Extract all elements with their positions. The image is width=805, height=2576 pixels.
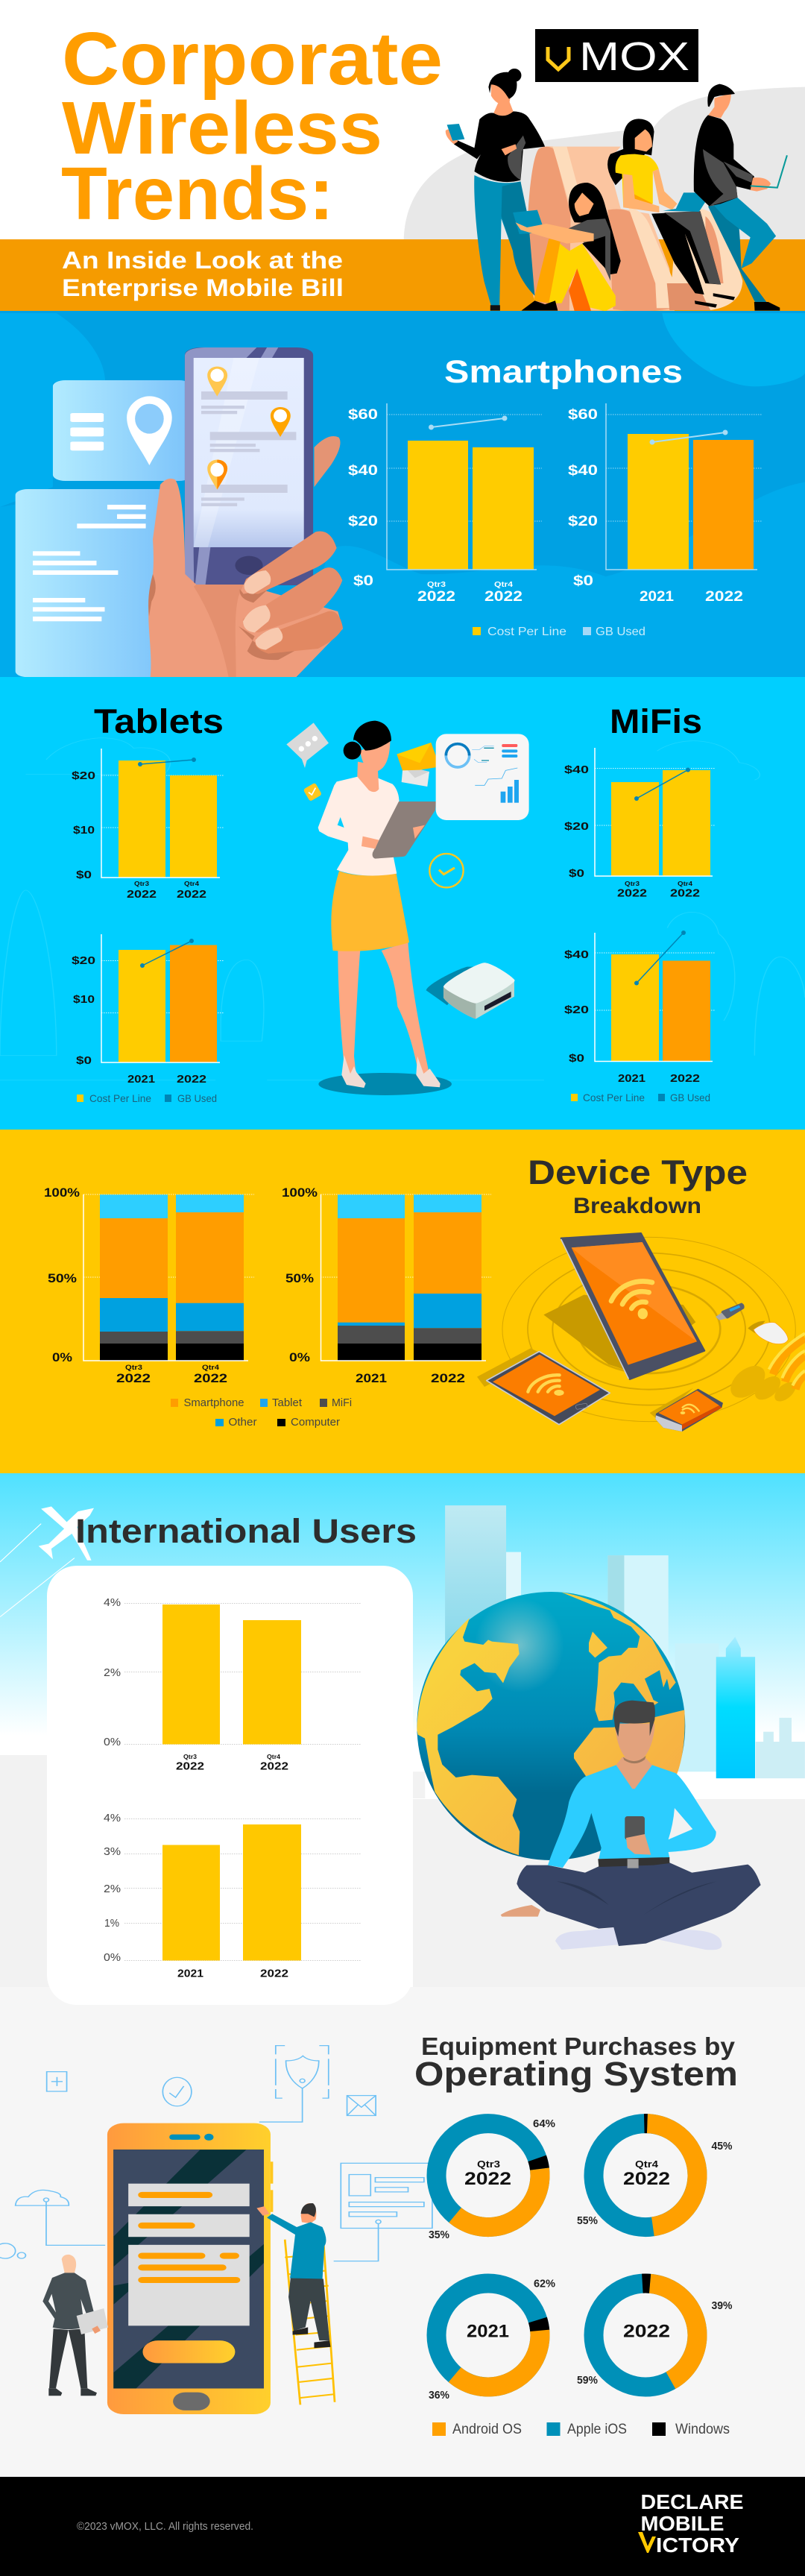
- bar chart: smartphones by quarter: $40: [348, 463, 378, 479]
- hair: [613, 1701, 655, 1736]
- legend: mifis: GB Used: [670, 1092, 710, 1103]
- face: [360, 740, 390, 772]
- subtitle: An Inside Look at the: [62, 247, 343, 274]
- icon: mifi router: [426, 963, 515, 1019]
- card: international charts: [47, 1566, 413, 2005]
- stacked bars: quarters: [44, 1185, 254, 1385]
- bar chart: tablets by quarter: 2022: [177, 888, 206, 901]
- bar chart: smartphones by year: [568, 403, 763, 605]
- bar chart: mifis by year: $20: [564, 1004, 589, 1016]
- donut chart: Q4 2022: 45%: [711, 2140, 732, 2153]
- stacked bars: quarters: Qtr4: [202, 1364, 219, 1371]
- donut chart: Q4 2022: 55%: [577, 2214, 598, 2227]
- stacked bars: years: 0%: [289, 1350, 310, 1364]
- bar chart: international by year: 2021: [177, 1968, 203, 1980]
- donut chart: Q3 2022: 35%: [429, 2229, 449, 2241]
- panel: smartphones: [0, 311, 805, 678]
- legend: device types: Other: [228, 1416, 257, 1429]
- illustration: globe: [417, 1592, 685, 1860]
- bar chart: international by quarter: Qtr4: [267, 1754, 281, 1760]
- bar chart: smartphones by quarter: $20: [348, 514, 378, 529]
- stacked bars: quarters: 100%: [44, 1185, 80, 1200]
- bar chart: mifis by quarter: 2022: [617, 887, 647, 899]
- bar chart: smartphones by year: 2022: [705, 589, 743, 605]
- person: man on ladder: [256, 2203, 331, 2348]
- shoes: [341, 1055, 441, 1088]
- heading: Device Type Breakdown: Breakdown: [573, 1194, 701, 1218]
- bar chart: smartphones by quarter: $0: [353, 573, 373, 589]
- subtitle: Enterprise Mobile Bill: [62, 274, 344, 301]
- bar chart: tablets by quarter: $0: [76, 869, 92, 881]
- heading: equipment purchases: [414, 2032, 738, 2093]
- donut chart: Q3 2022: 2022: [464, 2169, 511, 2189]
- donut chart: Q3 2022: Qtr3: [477, 2158, 500, 2170]
- donut chart: 2021: 62%: [534, 2278, 555, 2290]
- bar chart: smartphones by quarter: Qtr4: [494, 581, 514, 589]
- bar chart: mifis by quarter: [564, 748, 716, 899]
- tablet: [373, 802, 436, 859]
- person: man standing with documents: [42, 2255, 108, 2396]
- bar chart: tablets by year: 2021: [127, 1073, 155, 1086]
- donut chart: Q3 2022: [429, 2117, 555, 2241]
- bar chart: international by quarter: 4%: [104, 1596, 121, 1609]
- stacked bars: years: 100%: [282, 1185, 318, 1200]
- bar chart: tablets by quarter: Qtr4: [184, 881, 200, 887]
- illustration: phone with map pins and cards: [16, 347, 341, 677]
- icon: chat bubble: [286, 722, 329, 768]
- bar chart: tablets by quarter: $10: [73, 824, 95, 837]
- panel: device type breakdown: [0, 1130, 805, 1473]
- person: woman on chair with laptop: [607, 119, 735, 308]
- bar chart: mifis by year: 2021: [618, 1072, 645, 1085]
- phone: [185, 347, 313, 585]
- person: standing woman with phone: [446, 69, 545, 311]
- illustration: big phone with two businessmen: [0, 2046, 432, 2414]
- bar chart: mifis by quarter: Qtr3: [625, 881, 640, 887]
- donut chart: 2022: 39%: [711, 2299, 732, 2312]
- heading: Device Type Breakdown: [528, 1153, 748, 1218]
- legend: device types: Computer: [291, 1416, 340, 1429]
- bar chart: mifis by year: $0: [569, 1052, 584, 1065]
- subtitle band: [0, 239, 805, 311]
- legend: smartphones: Cost Per Line: [487, 626, 566, 638]
- legend: operating systems: Windows: [675, 2422, 730, 2437]
- title: Wireless: [62, 86, 382, 170]
- heading: Tablets: Tablets: [94, 702, 224, 740]
- large wifi signal: [724, 1333, 805, 1405]
- legend: device types: [171, 1396, 352, 1429]
- bar chart: international by quarter: [104, 1596, 362, 1773]
- legs: [338, 942, 430, 1079]
- donut chart: Q3 2022: 64%: [533, 2117, 555, 2130]
- bar chart: international by year: 0%: [104, 1951, 121, 1964]
- legend: smartphones: GB Used: [596, 626, 645, 638]
- torso: [548, 1765, 716, 1868]
- header background blob: [404, 87, 805, 239]
- tablet shadow: [543, 1295, 695, 1372]
- belt: [598, 1857, 669, 1867]
- donut chart: 2022: 59%: [577, 2374, 598, 2387]
- bar chart: international by quarter: 2022: [260, 1760, 288, 1773]
- bar chart: tablets by quarter: Qtr3: [134, 881, 150, 887]
- heading: equipment purchases: Equipment Purchases by: [421, 2032, 736, 2060]
- bar chart: mifis by year: 2022: [670, 1072, 700, 1085]
- bar chart: mifis by quarter: $20: [564, 820, 589, 833]
- bar chart: mifis by quarter: Qtr4: [678, 881, 693, 887]
- bar chart: international by year: 1%: [104, 1917, 119, 1930]
- illustration: man sitting with phone: [501, 1701, 761, 1950]
- blouse: [318, 777, 400, 875]
- chair: [527, 146, 742, 311]
- signal rings: [502, 1237, 795, 1422]
- floating card: text: [16, 489, 169, 677]
- icon: check badge: [303, 783, 322, 802]
- hands: [362, 825, 425, 848]
- legend: device types: Tablet: [272, 1396, 303, 1409]
- heading: Device Type Breakdown: Device Type: [528, 1153, 748, 1191]
- bar chart: smartphones by year: $20: [568, 514, 598, 529]
- bar chart: international by year: 4%: [104, 1812, 121, 1824]
- copyright: ©2023 vMOX, LLC. All rights reserved.: [77, 2520, 253, 2533]
- icon: envelopes: [397, 743, 440, 787]
- feet: [501, 1905, 540, 1917]
- bar chart: international by year: [104, 1812, 362, 1980]
- line icons and connectors: [0, 2046, 432, 2261]
- hair: [344, 721, 391, 760]
- stacked bars: quarters: 2022: [116, 1371, 151, 1385]
- illustration: airplane and trails: [0, 1506, 94, 1617]
- icon: check circle: [429, 854, 464, 887]
- bar chart: international by year: 3%: [104, 1845, 121, 1858]
- slogan: Declare Mobile Victory: MOBILE: [641, 2512, 724, 2535]
- title: Corporate: [62, 17, 443, 101]
- donut chart: 2021: [429, 2278, 555, 2402]
- bar chart: mifis by quarter: $0: [569, 867, 584, 880]
- bar chart: mifis by quarter: 2022: [670, 887, 700, 899]
- bar chart: tablets by year: 2022: [177, 1073, 206, 1086]
- floor strip behind card bottom: [0, 1987, 805, 2017]
- illustration: team with devices on a chair: [446, 69, 787, 311]
- legend: operating systems: [432, 2422, 730, 2437]
- panel: international users: [0, 1473, 805, 2017]
- donut chart: 2021: 2021: [467, 2322, 509, 2341]
- legend: operating systems: Apple iOS: [567, 2422, 627, 2437]
- heading: Smartphones: Smartphones: [444, 354, 683, 390]
- legend: device types: MiFi: [332, 1396, 352, 1409]
- device: large tablet: [561, 1233, 704, 1379]
- bar chart: tablets by quarter: [72, 749, 224, 901]
- title: [61, 17, 443, 236]
- bar chart: smartphones by year: 2021: [640, 589, 674, 605]
- stacked bars: years: 50%: [285, 1271, 314, 1285]
- stacked bars: quarters: 2022: [194, 1371, 227, 1385]
- panel: footer: [0, 2477, 805, 2576]
- bar chart: smartphones by quarter: [348, 403, 542, 605]
- stacked bars: quarters: 50%: [48, 1271, 77, 1285]
- donut chart: 2022: [577, 2283, 732, 2387]
- bar chart: international by year: 2022: [260, 1968, 288, 1980]
- bar chart: tablets by quarter: 2022: [127, 888, 157, 901]
- bar chart: smartphones by quarter: 2022: [484, 589, 523, 605]
- logo: vMOX: [535, 29, 698, 82]
- person: man with laptop: [694, 84, 787, 311]
- donut chart: Q4 2022: [577, 2123, 732, 2227]
- illustration: hand holding phone: [148, 479, 343, 677]
- neck: [357, 762, 379, 792]
- floating card: location: [53, 380, 192, 481]
- ladder: [285, 2240, 335, 2405]
- legend: mifis: Cost Per Line: [583, 1092, 645, 1103]
- skirt: [331, 871, 409, 951]
- panel: equipment purchases by operating system: [0, 2005, 805, 2477]
- bar chart: tablets by year: $20: [72, 954, 95, 967]
- stacked bars: quarters: Qtr3: [125, 1364, 142, 1371]
- slogan: Declare Mobile Victory: DECLARE: [641, 2490, 744, 2513]
- stacked bars: years: 2022: [431, 1371, 465, 1385]
- panel: header: [0, 0, 805, 313]
- heading: equipment purchases: Operating System: [414, 2055, 738, 2093]
- bar chart: international by quarter: Qtr3: [183, 1754, 198, 1760]
- heading: International Users: International Users: [75, 1512, 417, 1550]
- decorative circles and waves: [0, 313, 805, 678]
- legend: tablets: GB Used: [177, 1092, 217, 1104]
- bar chart: tablets by year: $10: [73, 993, 95, 1006]
- legend: operating systems: Android OS: [452, 2422, 522, 2437]
- big phone: [107, 2123, 273, 2414]
- stacked bars: years: [282, 1185, 491, 1385]
- legend: tablets: Cost Per Line: [89, 1092, 151, 1104]
- legs: [517, 1862, 761, 1946]
- donut chart: Q4 2022: Qtr4: [635, 2158, 659, 2170]
- donut chart: Q4 2022: 2022: [623, 2169, 670, 2189]
- bar chart: international by year: 2%: [104, 1883, 121, 1895]
- title: Trends:: [61, 152, 334, 236]
- legend: mifis: [571, 1092, 710, 1103]
- bar chart: mifis by year: $40: [564, 948, 589, 961]
- donut chart: 2022: 2022: [623, 2322, 670, 2341]
- panel: dashboard: [436, 734, 529, 820]
- stacked bars: quarters: 0%: [52, 1350, 72, 1364]
- stacked bars: years: 2021: [356, 1371, 387, 1385]
- logo: vMOX: MOX: [579, 34, 689, 79]
- device: usb stick: [716, 1303, 745, 1320]
- bar chart: tablets by year: $0: [76, 1054, 92, 1067]
- bar chart: smartphones by quarter: 2022: [417, 589, 455, 605]
- bar chart: tablets by quarter: $20: [72, 769, 95, 782]
- bar chart: smartphones by quarter: Qtr3: [427, 581, 446, 589]
- bar chart: smartphones by quarter: $60: [348, 407, 378, 423]
- legend: device types: Smartphone: [183, 1396, 244, 1409]
- phone and hand: [625, 1816, 645, 1840]
- bar chart: smartphones by year: $40: [568, 463, 598, 479]
- device: mouse: [748, 1321, 788, 1344]
- illustration: wifi devices: [477, 1233, 805, 1432]
- ground shadow: [318, 1073, 452, 1095]
- panel: tablets and mifis: [0, 677, 805, 1130]
- index finger behind phone: [314, 436, 341, 487]
- legend: tablets: [77, 1092, 217, 1104]
- slogan: Declare Mobile Victory: [638, 2490, 744, 2557]
- bar chart: mifis by year: [564, 930, 716, 1085]
- slogan: Declare Mobile Victory: ICTORY: [656, 2534, 739, 2557]
- donut chart: 2021: 36%: [429, 2389, 449, 2402]
- bar chart: international by quarter: 0%: [104, 1736, 121, 1748]
- bar chart: tablets by year: [72, 934, 224, 1086]
- legend: smartphones: [473, 626, 645, 638]
- bar chart: smartphones by year: $0: [573, 573, 593, 589]
- neck and face: [615, 1724, 654, 1789]
- illustration: city skyline: [413, 1505, 805, 1798]
- device: small tablet: [477, 1348, 610, 1425]
- heading: MiFis: MiFis: [610, 702, 702, 740]
- person: woman sitting with tablet: [513, 183, 621, 311]
- bar chart: mifis by quarter: $40: [564, 763, 589, 776]
- bar chart: international by quarter: 2022: [176, 1760, 204, 1773]
- bar chart: international by quarter: 2%: [104, 1666, 121, 1679]
- bar chart: smartphones by year: $60: [568, 407, 598, 423]
- subtitle: [62, 247, 344, 301]
- illustration: businesswoman with tablet and floating icons: [286, 721, 529, 1095]
- device: phone: [650, 1388, 723, 1432]
- faint tree outlines: [0, 738, 805, 1080]
